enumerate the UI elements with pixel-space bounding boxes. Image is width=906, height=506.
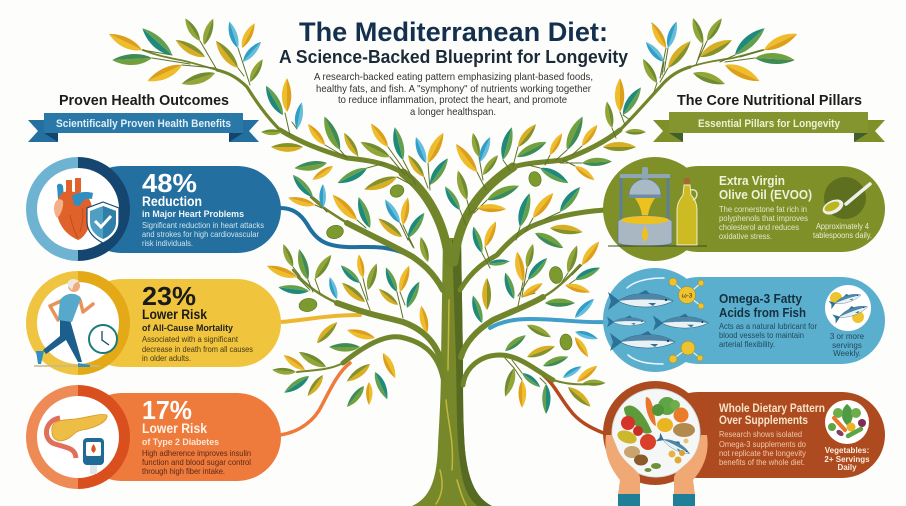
panel: 17% diabetes: of Type 2 Diabetes xyxy=(142,437,219,448)
panel: 23% mortality: Lower Risk xyxy=(142,307,207,322)
icon: pancreas and glucose meter xyxy=(46,414,107,474)
panel: 23% mortality: of All-Cause Mortality xyxy=(142,323,234,334)
icon: vegetables xyxy=(825,400,869,444)
left ribbon banner xyxy=(28,113,259,142)
panel: 23% mortality: decrease in death from all causes xyxy=(142,345,253,354)
panel: 17% diabetes: 17% xyxy=(142,395,192,425)
icon: fish and omega-3 molecules: ω-3 xyxy=(682,292,693,300)
panel: 23% mortality: 23% xyxy=(142,281,196,311)
panel: omega-3: Acts as a natural lubricant for xyxy=(719,322,817,331)
panel: olive oil: oxidative stress. xyxy=(719,232,772,241)
title xyxy=(279,17,628,67)
panel: omega-3: arterial flexibility. xyxy=(719,340,775,349)
panel: whole dietary pattern: Omega-3 supplements do xyxy=(719,440,807,449)
title: A Science-Backed Blueprint for Longevity xyxy=(279,47,628,67)
panel: 48% heart xyxy=(26,157,281,261)
right ribbon banner xyxy=(653,112,885,142)
branches xyxy=(143,50,763,385)
panel: whole dietary pattern: not replicate the longevity xyxy=(719,449,806,458)
twigs xyxy=(142,23,764,384)
panel: 48% heart: risk individuals. xyxy=(142,239,193,248)
panel: 23% mortality xyxy=(26,271,281,375)
icon: food plate held by hands xyxy=(605,389,708,506)
tree: trunk and branches xyxy=(142,23,764,506)
panel: omega-3: blood vessels to maintain xyxy=(719,331,804,340)
title: The Mediterranean Diet: xyxy=(299,17,608,47)
panel: olive oil: Approximately 4 xyxy=(816,222,870,231)
panel: omega-3: servings xyxy=(832,341,862,350)
panel: whole dietary pattern: Vegetables: xyxy=(825,446,869,455)
icon: heart with shield xyxy=(54,178,119,243)
panel: olive oil: cholesterol and reduces xyxy=(719,223,799,232)
icon: spoon of oil xyxy=(820,177,870,219)
panel: omega-3: Omega-3 Fatty xyxy=(719,291,803,306)
panel: whole dietary pattern: Research shows isolated xyxy=(719,430,802,439)
panel: omega-3: Weekly. xyxy=(833,349,861,358)
panel: olive oil: The cornerstone fat rich in xyxy=(719,205,807,214)
panel: omega-3 xyxy=(603,268,885,372)
left ribbon banner: Scientifically Proven Health Benefits xyxy=(56,118,231,130)
trunk xyxy=(412,238,492,506)
panel: olive oil xyxy=(603,157,885,261)
panel: olive oil: Olive Oil (EVOO) xyxy=(719,187,812,202)
panel: whole dietary pattern: benefits of the whole diet. xyxy=(719,458,805,467)
colored connectors from panels to the tree xyxy=(280,208,606,435)
panel: 17% diabetes: Lower Risk xyxy=(142,421,207,436)
left section heading: Proven Health Outcomes xyxy=(59,93,229,109)
panel: 23% mortality: Associated with a significant xyxy=(142,335,239,344)
panel: 17% diabetes: function and blood sugar control xyxy=(142,458,251,467)
panel: 48% heart: in Major Heart Problems xyxy=(142,209,244,220)
panel: omega-3: 3 or more xyxy=(830,332,865,341)
right ribbon banner: Essential Pillars for Longevity xyxy=(698,118,841,130)
intro text: a longer healthspan. xyxy=(410,107,496,118)
panel: 48% heart: Reduction xyxy=(142,194,202,209)
icon: running senior and clock xyxy=(34,279,117,367)
panel: whole dietary pattern: Whole Dietary Pattern xyxy=(719,401,825,415)
panel: whole dietary pattern: Over Supplements xyxy=(719,413,808,427)
panel: whole dietary pattern: 2+ Servings xyxy=(824,455,870,464)
panel: olive oil: polyphenols that improves xyxy=(719,214,808,223)
panel: 23% mortality: in older adults. xyxy=(142,354,191,363)
panel: omega-3: Acids from Fish xyxy=(719,305,806,320)
intro text: to reduce inflammation, protect the heart, and promote xyxy=(338,95,567,106)
intro text xyxy=(314,72,593,118)
intro text: healthy fats, and fish. A "symphony" of nutrients working together xyxy=(316,84,592,95)
intro text: A research-backed eating pattern emphasizing plant-based foods, xyxy=(314,72,593,83)
right section heading: The Core Nutritional Pillars xyxy=(677,93,862,109)
panel: whole dietary pattern: Daily xyxy=(837,463,857,472)
icon: fish and omega-3 molecules xyxy=(607,278,708,364)
panel: whole dietary pattern xyxy=(603,381,885,506)
panel: olive oil: tablespoons daily. xyxy=(813,231,872,240)
panel: 48% heart: and strokes for high cardiovascular xyxy=(142,230,259,239)
panel: 17% diabetes: High adherence improves insulin xyxy=(142,449,251,458)
panel: 17% diabetes xyxy=(26,385,281,489)
icon: plate of fish xyxy=(825,285,871,331)
panel: olive oil: Extra Virgin xyxy=(719,173,785,188)
olives xyxy=(298,170,573,350)
panel: 17% diabetes: through high fiber intake. xyxy=(142,467,225,476)
icon: olive press and bottle xyxy=(608,167,707,246)
tree leaves and olives xyxy=(106,16,799,414)
panel: 48% heart: Significant reduction in heart attacks xyxy=(142,221,264,230)
panel: 48% heart: 48% xyxy=(142,168,197,198)
